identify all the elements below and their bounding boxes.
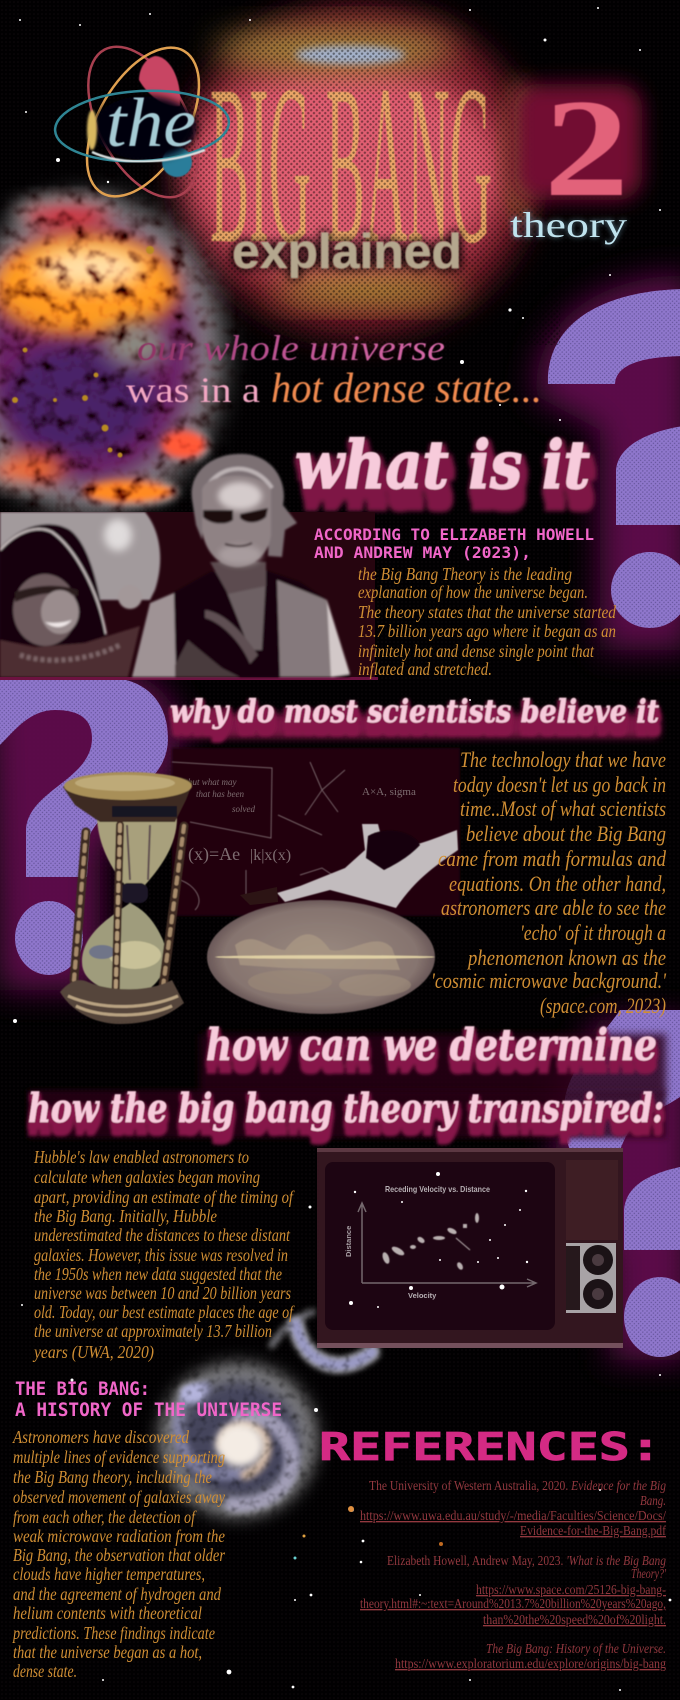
heading: history: A HISTORY OF THE UNIVERSE — [15, 1400, 282, 1421]
body text: what is it: 13.7 billion years ago where it began as an — [358, 621, 616, 641]
pillars — [74, 825, 184, 1017]
heading: history — [15, 1379, 282, 1421]
face — [202, 476, 271, 567]
body text: Hubble: the 1950s when new data suggested that the — [34, 1264, 282, 1284]
chalkboard scientist: but what may — [188, 777, 237, 787]
heading: what is it: what is it — [295, 426, 590, 504]
hourglass — [60, 772, 193, 1024]
body text: Hubble: galaxies. However, this issue was resolved in — [34, 1245, 288, 1265]
hot dense state: hot dense state... — [271, 366, 542, 412]
body text: history: Big Bang, the observation that older — [13, 1545, 225, 1565]
chalkboard scientist: that has been — [196, 789, 244, 799]
jacket — [132, 570, 350, 677]
photo: astronaut woman — [0, 512, 160, 677]
tv control panel — [566, 1243, 616, 1313]
body text: what is it: inflated and stretched. — [358, 659, 492, 679]
companion galaxy — [272, 1312, 372, 1365]
chart axes — [358, 1203, 536, 1287]
chalkboard scientist: (x)=Ae — [188, 844, 240, 865]
reference list — [360, 1478, 667, 1671]
shirt — [226, 578, 266, 650]
body text: history: observed movement of galaxies away — [13, 1487, 225, 1507]
atom logo — [53, 29, 231, 215]
title: explained: explained — [232, 225, 462, 279]
orange orbit — [64, 29, 222, 215]
body text: history: that the universe began as a hot, — [13, 1642, 202, 1662]
reference list: Elizabeth Howell, Andrew May, 2023. 'What is the Big Bang — [387, 1553, 666, 1568]
body text: history: clouds have higher temperatures, — [13, 1564, 205, 1584]
maroon photo band — [0, 512, 375, 677]
body text: what is it: The theory states that the universe started — [358, 602, 616, 622]
body text: Hubble: calculate when galaxies began moving — [34, 1167, 260, 1187]
number 2: 2 — [544, 71, 629, 226]
reference list: Bang. — [640, 1493, 666, 1508]
teal orbit — [53, 86, 231, 166]
attribution heading: ACCORDING TO ELIZABETH HOWELL — [314, 525, 594, 544]
galaxy core — [216, 1423, 264, 1467]
x axis label: Velocity — [408, 1291, 437, 1300]
panel: history of the universe — [11, 1379, 282, 1681]
spiral galaxy — [164, 1312, 372, 1512]
body text: why — [431, 747, 667, 1018]
top right question mark — [548, 289, 680, 628]
tv knobs — [583, 1245, 613, 1275]
body text: Hubble: the Big Bang. Initially, Hubble — [34, 1206, 217, 1226]
body text: Hubble: apart, providing an estimate of the timing of — [34, 1187, 295, 1207]
body text: history: dense state. — [13, 1661, 77, 1681]
body text: Hubble: the universe at approximately 13.7 billion — [34, 1321, 272, 1341]
body text: history — [11, 1427, 225, 1681]
body text: what is it: infinitely hot and dense single point that — [358, 641, 595, 661]
body text: history: the Big Bang theory, including the — [13, 1467, 212, 1487]
chalkboard scientist: solved — [232, 804, 255, 814]
photo: man with sunglasses — [132, 454, 350, 677]
galaxy halo — [164, 1368, 312, 1512]
tagline — [126, 328, 542, 412]
tv cabinet — [317, 1148, 623, 1348]
neck — [120, 883, 148, 903]
our whole universe: our whole universe — [137, 328, 445, 368]
hair — [192, 454, 297, 557]
nebula halftone overlay — [170, 0, 560, 345]
chalkboard scientist: A×A, sigma — [362, 786, 416, 798]
body text: what is it: the Big Bang Theory is the leading — [358, 564, 572, 584]
question mark glow — [0, 275, 680, 1360]
top cap — [63, 773, 193, 822]
body text: history: weak microwave radiation from the — [13, 1526, 225, 1546]
left question mark — [0, 678, 168, 975]
neck — [210, 562, 266, 594]
was in a: was in a — [126, 370, 260, 410]
body text: what is it: explanation of how the universe began. — [358, 582, 588, 602]
heading: references: REFERENCES: — [319, 1425, 661, 1469]
attribution heading: AND ANDREW MAY (2023), — [314, 543, 531, 562]
lower bulb — [82, 903, 165, 993]
body text: Hubble — [32, 1147, 295, 1362]
sunglasses — [203, 508, 268, 524]
scientist in white coat — [277, 824, 458, 908]
body text: Hubble: Hubble's law enabled astronomers to — [33, 1147, 249, 1167]
red orbit — [66, 29, 220, 215]
right lower question mark — [564, 1010, 680, 1357]
body text: Hubble: universe was between 10 and 20 billion years — [34, 1283, 291, 1303]
chart title: Receding Velocity vs. Distance — [385, 1184, 490, 1194]
supernova specks — [12, 246, 154, 458]
chalkboard scientist: |k|x(x) — [250, 847, 291, 864]
tv screen — [325, 1162, 555, 1330]
galaxy arms — [178, 1383, 292, 1505]
y axis label: Distance — [344, 1226, 353, 1257]
screen stars — [349, 1172, 528, 1308]
base — [60, 980, 184, 1024]
heading haze — [200, 1034, 666, 1094]
body text: history: from each other, the detection of — [13, 1507, 197, 1527]
body text: Hubble: old. Today, our best estimate places the age of — [34, 1302, 295, 1322]
blue electron — [162, 147, 192, 177]
attribution heading — [314, 525, 594, 562]
word the: the — [106, 85, 196, 162]
body text: Hubble: years (UWA, 2020) — [32, 1342, 154, 1362]
body text: history: multiple lines of evidence supporting — [13, 1447, 225, 1467]
pink electron — [139, 56, 180, 106]
nebula behind title — [182, 5, 534, 335]
tv speaker — [566, 1160, 618, 1240]
reference list: Theory?' — [631, 1566, 667, 1581]
cosmic microwave background map — [207, 900, 435, 1014]
dark shadow behind the word — [93, 96, 197, 160]
body text: history: and the agreement of hydrogen and — [13, 1584, 221, 1604]
panel: why do most scientists believe it — [60, 692, 667, 1024]
panel: references — [319, 1425, 667, 1671]
upper bulb — [97, 815, 177, 885]
body text: history: predictions. These findings indicate — [11, 1623, 215, 1643]
left sleeve — [132, 593, 176, 677]
retro television chart — [317, 1148, 623, 1348]
vest — [277, 580, 335, 677]
decorative purple question marks — [0, 275, 680, 1360]
chalkboard scientist — [172, 748, 460, 916]
body text: history: Astronomers have discovered — [12, 1427, 189, 1447]
orange supernova — [0, 199, 215, 505]
panel: what is it — [0, 426, 616, 680]
body text: what is it — [358, 564, 616, 679]
heading: history: THE BIG BANG: — [15, 1379, 150, 1400]
word theory: theory — [510, 205, 627, 245]
body text: Hubble: underestimated the distances to these distant — [34, 1225, 291, 1245]
body text: history: helium contents with theoretical — [13, 1603, 202, 1623]
reference list: The University of Western Australia, 2020. Evidence for the Big — [369, 1478, 666, 1493]
glow behind the number 2 — [514, 84, 642, 200]
panel: how can we determine — [28, 1020, 666, 1362]
chart galaxies — [381, 1213, 479, 1271]
